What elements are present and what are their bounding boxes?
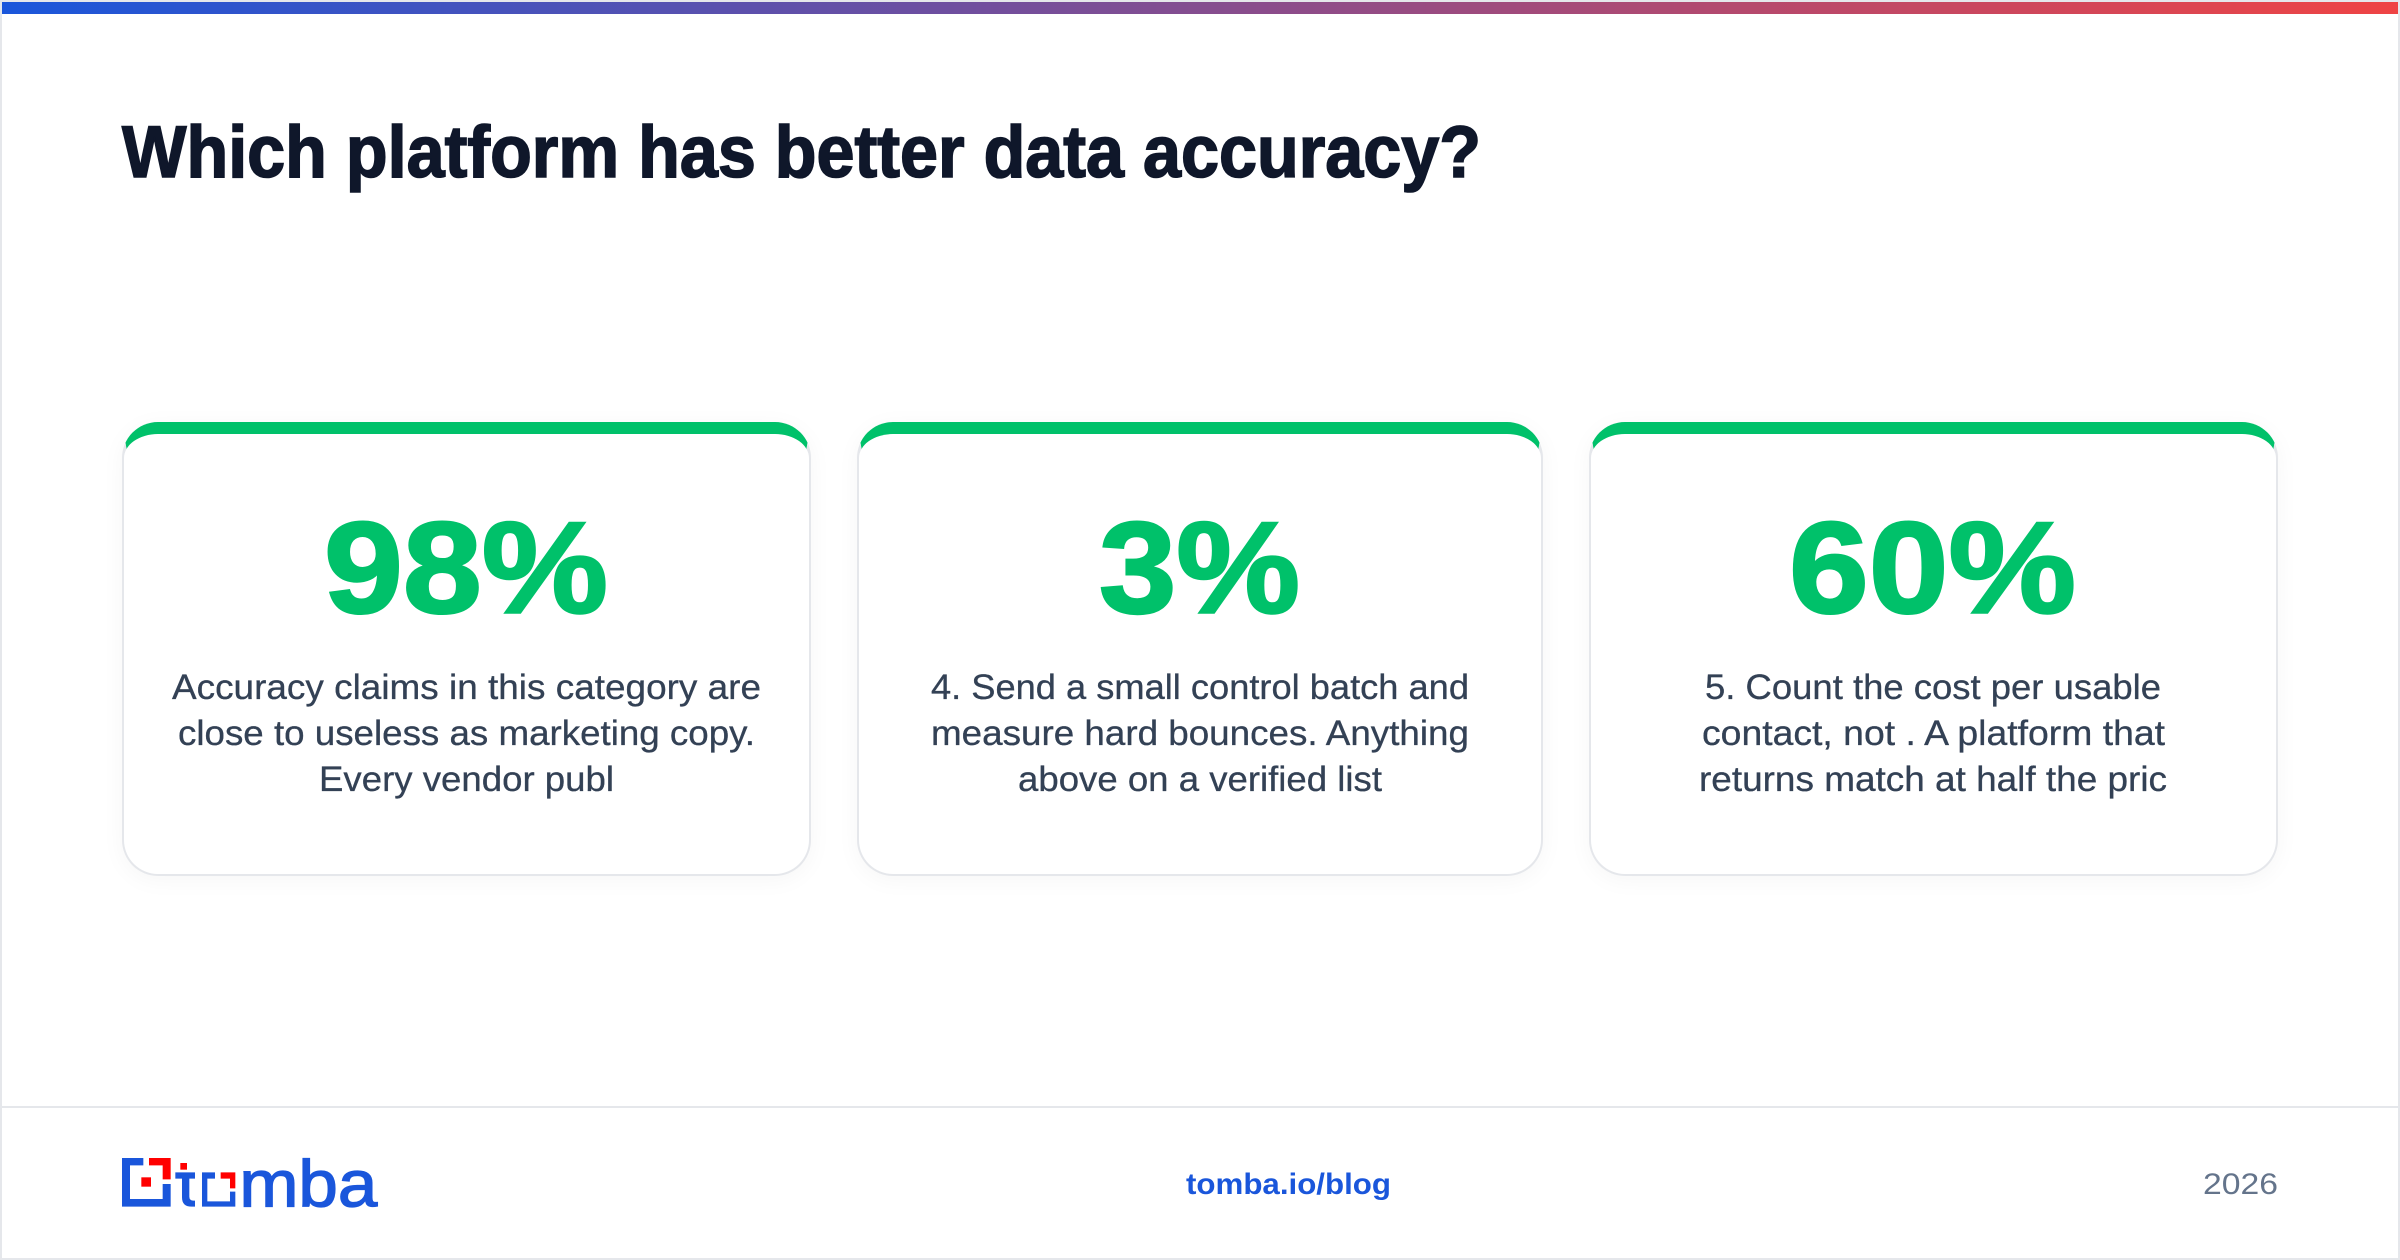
stat number 98%: 98% — [324, 494, 608, 640]
description text: returns match at half the pric — [1699, 759, 2167, 799]
description text: Accuracy claims in this category are — [172, 667, 761, 707]
logo: tomba — [122, 1147, 378, 1221]
footer — [2, 1106, 2398, 1258]
description text: measure hard bounces. Anything — [931, 713, 1469, 753]
description text — [1699, 667, 2167, 799]
description text — [931, 667, 1469, 799]
title: Which platform has better data accuracy? — [122, 112, 1481, 193]
description text: Every vendor publ — [319, 759, 614, 799]
description text: 4. Send a small control batch and — [931, 667, 1469, 707]
description text: contact, not . A platform that — [1702, 713, 2165, 753]
description text: above on a verified list — [1018, 759, 1382, 799]
top gradient bar — [2, 2, 2398, 14]
year: 2026 — [2203, 1168, 2278, 1201]
panel: stat card 98% — [122, 422, 811, 876]
footer link: tomba.io/blog — [1186, 1168, 1391, 1201]
description text: close to useless as marketing copy. — [178, 713, 755, 753]
panel: stat card 60% — [1589, 422, 2278, 876]
description text: 5. Count the cost per usable — [1705, 667, 2161, 707]
stat number 60%: 60% — [1789, 494, 2076, 640]
description text — [172, 667, 761, 799]
stat number 3%: 3% — [1099, 494, 1300, 640]
panel: stat card 3% — [857, 422, 1543, 876]
logo: tomba: mba — [239, 1147, 378, 1221]
